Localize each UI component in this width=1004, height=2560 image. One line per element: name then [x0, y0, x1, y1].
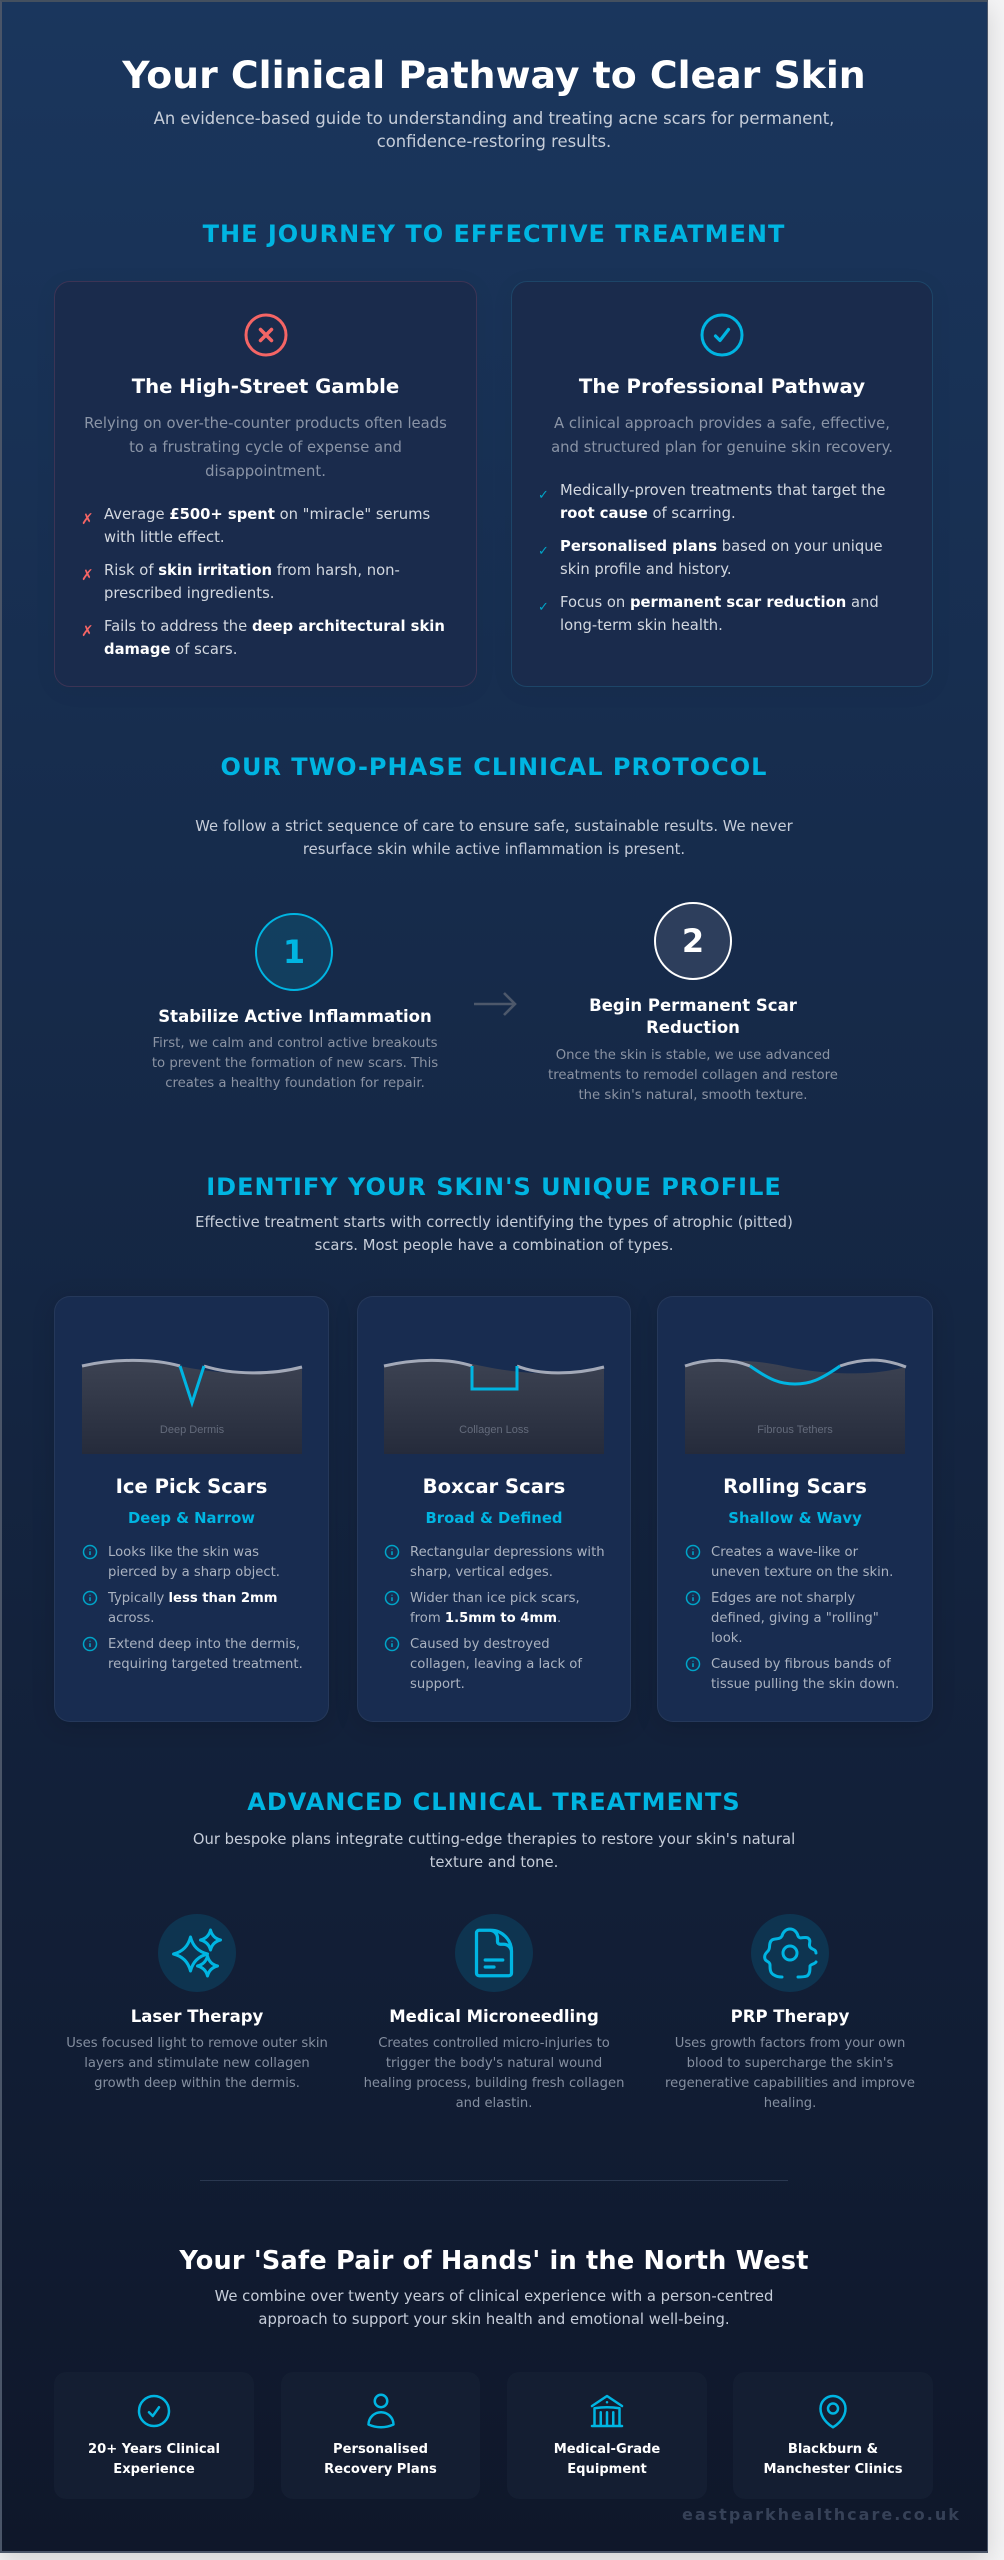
bullet 3: damage of scars.	[104, 641, 237, 658]
fact 2: Typically less than 2mm	[108, 1591, 277, 1606]
trust intro	[0, 2285, 988, 2331]
badge label: Equipment	[567, 2462, 647, 2477]
treatment description: Uses focused light to remove outer skin	[66, 2036, 328, 2051]
fact 1	[686, 1544, 893, 1580]
treatment: medical microneedling	[354, 1914, 634, 2114]
fact 1: sharp, vertical edges.	[410, 1565, 553, 1580]
scar facts	[686, 1544, 899, 1692]
fact 3: Extend deep into the dermis,	[108, 1637, 300, 1652]
title: Your Clinical Pathway to Clear Skin	[122, 53, 866, 97]
treatment title: PRP Therapy	[731, 2007, 849, 2026]
protocol intro	[195, 818, 793, 858]
fact 3: Caused by fibrous bands of	[711, 1657, 891, 1672]
treatment description	[650, 2034, 930, 2114]
bullet 1: Medically-proven treatments that target the	[560, 482, 885, 499]
bullet 2: Personalised plans based on your unique	[560, 538, 883, 555]
fact 1	[82, 1544, 280, 1580]
scar title: Rolling Scars	[723, 1475, 867, 1498]
badge label: Medical-Grade	[554, 2442, 660, 2457]
profile intro: Effective treatment starts with correctly identifying the types of atrophic (pitted)	[195, 1214, 793, 1231]
card description: to a frustrating cycle of expense and	[129, 439, 402, 456]
diagram: rolling scar: Fibrous Tethers	[757, 1424, 833, 1436]
badge: recovery plans	[281, 2372, 480, 2499]
badge: equipment	[507, 2372, 707, 2499]
arrow between phases	[474, 992, 517, 1016]
badge label: Personalised	[333, 2442, 428, 2457]
heading: treatments section: ADVANCED CLINICAL TREATMENTS	[247, 1788, 741, 1816]
bullet 1: with little effect.	[104, 529, 225, 546]
bullet 2: prescribed ingredients.	[104, 585, 274, 602]
icon: map pin	[813, 2391, 853, 2431]
scar subtitle: Broad & Defined	[426, 1510, 562, 1527]
heading: journey section: THE JOURNEY TO EFFECTIVE TREATMENT	[203, 220, 785, 248]
card description: disappointment.	[205, 463, 326, 480]
fact 3: Caused by destroyed	[410, 1637, 550, 1652]
number badge 2: 2	[682, 922, 704, 960]
card description	[84, 415, 447, 480]
fact 3	[82, 1636, 303, 1672]
icon: sparkles	[158, 1914, 236, 1992]
badge label	[733, 2440, 933, 2480]
panel: boxcar scars	[357, 1296, 631, 1722]
phase 2 title	[589, 996, 797, 1037]
card description: A clinical approach provides a safe, effective,	[554, 415, 890, 432]
diagram: rolling scar	[684, 1358, 906, 1454]
fact 1: pierced by a sharp object.	[108, 1565, 280, 1580]
fact 2	[384, 1590, 580, 1626]
bullet 1	[538, 482, 885, 522]
treatment description: and elastin.	[456, 2096, 532, 2111]
icon: cog	[751, 1914, 829, 1992]
bullet 3: ✓	[538, 600, 549, 615]
bullet 3: long-term skin health.	[560, 617, 723, 634]
badge label: 20+ Years Clinical	[88, 2442, 220, 2457]
phase 2 title: Begin Permanent Scar	[589, 996, 797, 1015]
fact 3	[686, 1656, 899, 1692]
bullet 1: Average £500+ spent on "miracle" serums	[104, 506, 430, 523]
icon: document	[455, 1914, 533, 1992]
header	[122, 53, 866, 151]
bullet 2: skin profile and history.	[560, 561, 732, 578]
treatment description	[354, 2034, 634, 2114]
panel: rolling scars	[657, 1296, 933, 1722]
card description: and structured plan for genuine skin recovery.	[551, 439, 893, 456]
fact 2	[686, 1590, 879, 1646]
fact 3: requiring targeted treatment.	[108, 1657, 303, 1672]
bullet 3	[538, 594, 879, 634]
fact 1: Rectangular depressions with	[410, 1545, 605, 1560]
fact 1: Creates a wave-like or	[711, 1545, 858, 1560]
card description	[551, 415, 893, 456]
panel: high-street gamble	[54, 281, 477, 687]
icon: check circle	[134, 2391, 174, 2431]
bullet 2: ✓	[538, 544, 549, 559]
fact 3: tissue pulling the skin down.	[711, 1677, 899, 1692]
fact 2: Edges are not sharply	[711, 1591, 855, 1606]
scar subtitle: Deep & Narrow	[128, 1510, 255, 1527]
icon: building	[587, 2391, 627, 2431]
fact 2: from 1.5mm to 4mm.	[410, 1611, 561, 1626]
fact 2: look.	[711, 1631, 743, 1646]
badge label	[281, 2440, 480, 2480]
bullet 2	[538, 538, 883, 578]
card heading: The High-Street Gamble	[132, 375, 399, 398]
diagram: boxcar scar	[384, 1358, 604, 1454]
treatment description: Uses growth factors from your own	[675, 2036, 905, 2051]
phase 1 description: First, we calm and control active breakouts	[152, 1036, 438, 1051]
treatment title: Laser Therapy	[131, 2007, 263, 2026]
number badge 1	[255, 913, 333, 991]
bullet 3	[81, 618, 445, 658]
treatment description: trigger the body's natural wound	[386, 2056, 602, 2071]
number badge 2	[654, 902, 732, 980]
phase 1 description: to prevent the formation of new scars. This	[152, 1056, 438, 1071]
panel: ice pick scars	[54, 1296, 329, 1722]
cross bullets	[81, 506, 445, 658]
bullet 3: Focus on permanent scar reduction and	[560, 594, 879, 611]
treatment description: Creates controlled micro-injuries to	[378, 2036, 610, 2051]
phase 2	[548, 902, 838, 1103]
protocol intro: We follow a strict sequence of care to ensure safe, sustainable results. We never	[195, 818, 793, 835]
fact 1	[384, 1544, 605, 1580]
icon: cross circle	[244, 314, 288, 356]
badge label: Blackburn &	[788, 2442, 878, 2457]
fact 3	[384, 1636, 582, 1692]
fact 3: support.	[410, 1677, 465, 1692]
subtitle	[154, 109, 834, 151]
fact 2: defined, giving a "rolling"	[711, 1611, 879, 1626]
card description: Relying on over-the-counter products often leads	[84, 415, 447, 432]
badge label: Recovery Plans	[324, 2462, 437, 2477]
number badge 1: 1	[283, 933, 305, 971]
phase 2 description: Once the skin is stable, we use advanced	[556, 1048, 830, 1063]
icon: user	[361, 2391, 401, 2431]
bullet 1: ✓	[538, 488, 549, 503]
badge: experience	[54, 2372, 254, 2499]
bullet 3: Fails to address the deep architectural skin	[104, 618, 445, 635]
bullet 1: root cause of scarring.	[560, 505, 736, 522]
icon: check circle	[700, 314, 744, 356]
check bullets	[538, 482, 885, 634]
phase 1 description	[152, 1036, 438, 1091]
bullet 2: ✗	[81, 566, 94, 584]
badge label: Manchester Clinics	[763, 2462, 903, 2477]
trust intro: We combine over twenty years of clinical experience with a person-centred	[215, 2288, 773, 2305]
badge: clinics	[733, 2372, 933, 2499]
heading: protocol section: OUR TWO-PHASE CLINICAL PROTOCOL	[221, 753, 767, 781]
heading: skin profile section: IDENTIFY YOUR SKIN'S UNIQUE PROFILE	[206, 1173, 782, 1201]
scar title: Boxcar Scars	[423, 1475, 565, 1498]
treatment description: layers and stimulate new collagen	[84, 2056, 310, 2071]
phase 2 description: treatments to remodel collagen and restore	[548, 1068, 838, 1083]
fact 1: uneven texture on the skin.	[711, 1565, 893, 1580]
treatment description: growth deep within the dermis.	[94, 2076, 300, 2091]
scar subtitle: Shallow & Wavy	[728, 1510, 862, 1527]
treatment description: regenerative capabilities and improve	[665, 2076, 915, 2091]
diagram: boxcar scar: Collagen Loss	[459, 1424, 529, 1436]
phase 1 title: Stabilize Active Inflammation	[158, 1007, 432, 1026]
badge label: Experience	[113, 2462, 195, 2477]
fact 2: Wider than ice pick scars,	[410, 1591, 580, 1606]
card heading: The Professional Pathway	[579, 375, 865, 398]
footer url: eastparkhealthcare.co.uk	[682, 2505, 961, 2524]
treatment description: healing process, building fresh collagen	[364, 2076, 624, 2091]
trust intro: approach to support your skin health and emotional well-being.	[258, 2311, 730, 2328]
subtitle: confidence-restoring results.	[377, 132, 611, 151]
protocol intro: resurface skin while active inflammation is present.	[303, 841, 685, 858]
fact 2	[82, 1590, 277, 1626]
treatments intro: texture and tone.	[430, 1854, 558, 1871]
treatment: prp therapy	[650, 1914, 930, 2114]
fact 2: across.	[108, 1611, 154, 1626]
heading: safe pair of hands: Your 'Safe Pair of Hands' in the North West	[179, 2246, 809, 2276]
panel: professional pathway	[511, 281, 933, 687]
bullet 1	[81, 506, 430, 546]
diagram: ice pick scar	[82, 1358, 302, 1454]
treatment description	[57, 2034, 337, 2094]
treatment title: Medical Microneedling	[389, 2007, 599, 2026]
treatments intro	[193, 1831, 795, 1871]
phase 1	[152, 913, 438, 1091]
badge label	[507, 2440, 707, 2480]
diagram: ice pick scar: Deep Dermis	[160, 1424, 225, 1436]
phase 1 description: creates a healthy foundation for repair.	[165, 1076, 425, 1091]
phase 2 description: the skin's natural, smooth texture.	[578, 1088, 808, 1103]
phase 2 description	[548, 1048, 838, 1103]
scar facts	[82, 1544, 303, 1672]
treatments intro: Our bespoke plans integrate cutting-edge therapies to restore your skin's natural	[193, 1831, 795, 1848]
profile intro	[195, 1214, 793, 1254]
treatment: laser therapy	[66, 1914, 328, 2091]
scar facts	[384, 1544, 605, 1692]
subtitle: An evidence-based guide to understanding and treating acne scars for permanent,	[154, 109, 834, 128]
phase 2 title: Reduction	[646, 1018, 740, 1037]
treatment description: blood to supercharge the skin's	[687, 2056, 893, 2071]
fact 1: Looks like the skin was	[108, 1545, 259, 1560]
bullet 1: ✗	[81, 510, 94, 528]
treatment description: healing.	[764, 2096, 816, 2111]
profile intro: scars. Most people have a combination of types.	[315, 1237, 673, 1254]
bullet 3: ✗	[81, 622, 94, 640]
bullet 2	[81, 562, 400, 602]
scar title: Ice Pick Scars	[116, 1475, 267, 1498]
badge label	[54, 2440, 254, 2480]
bullet 2: Risk of skin irritation from harsh, non-	[104, 562, 400, 579]
fact 3: collagen, leaving a lack of	[410, 1657, 582, 1672]
